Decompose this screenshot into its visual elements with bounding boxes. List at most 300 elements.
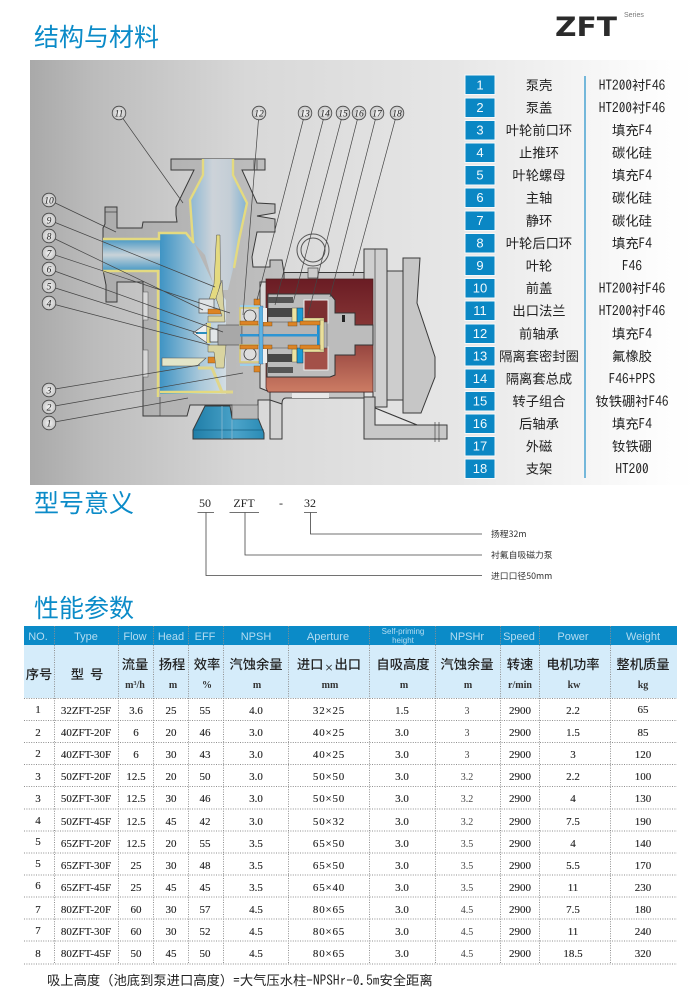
table header: m — [464, 680, 473, 691]
part callouts: 15 — [338, 110, 348, 120]
row 1: 32ZFT-25F — [61, 705, 111, 717]
row 10: 3.0 — [395, 904, 409, 916]
part numbers: 15 — [473, 394, 487, 408]
pump foot — [193, 405, 264, 439]
row 9: 3.5 — [461, 883, 473, 894]
part materials — [595, 75, 669, 476]
part names: 支架 — [526, 458, 552, 478]
table header: 自吸高度 — [376, 654, 430, 673]
part names: 泵盖 — [526, 98, 552, 116]
part names: 叶轮螺母 — [512, 165, 566, 184]
part names: 隔离套总成 — [506, 368, 572, 388]
row 8: 5 — [35, 858, 41, 870]
row 9 — [35, 880, 652, 894]
divider line — [584, 76, 586, 478]
row 9: 3.5 — [249, 882, 263, 894]
flange details — [105, 160, 257, 416]
row 11: 7 — [35, 925, 41, 937]
table header: Type — [74, 631, 98, 643]
row 4: 50×50 — [313, 771, 345, 783]
part numbers: 11 — [473, 303, 487, 318]
model code diagram — [198, 496, 553, 582]
row 5: 3.0 — [395, 793, 409, 805]
row 7: 65ZFT-20F — [61, 838, 111, 850]
row 11: 2900 — [509, 926, 532, 938]
row 1: 25 — [166, 705, 177, 717]
table header: Speed — [503, 631, 535, 643]
row 12: 45 — [166, 948, 177, 960]
table header: kw — [568, 680, 581, 691]
bearings — [240, 299, 267, 372]
row 7: 20 — [166, 838, 177, 850]
row 10: 80ZFT-20F — [61, 904, 111, 916]
row 1: 55 — [200, 705, 211, 717]
table header: mm — [322, 680, 339, 691]
series logo — [555, 12, 644, 43]
row 11: 52 — [200, 926, 210, 938]
row 7: 12.5 — [126, 838, 146, 850]
pump casing — [103, 159, 322, 419]
row 10: 4.5 — [249, 904, 263, 916]
part names: 叶轮前口环 — [506, 120, 572, 139]
table header: Head — [158, 631, 184, 643]
row 1: 32×25 — [313, 705, 345, 717]
part callouts: 16 — [354, 110, 364, 120]
row 7: 140 — [635, 838, 652, 850]
part numbers: 12 — [473, 326, 487, 341]
part numbers: 16 — [473, 416, 487, 431]
row 9: 25 — [130, 882, 142, 894]
row 5: 2900 — [509, 793, 532, 805]
table header: EFF — [195, 631, 216, 643]
table header: kg — [638, 680, 648, 691]
part callouts: 12 — [254, 110, 264, 120]
yellow liners — [103, 159, 247, 397]
part names — [499, 75, 579, 478]
housing top band — [284, 272, 364, 280]
row 2: 2900 — [509, 727, 532, 739]
rotor and magnets — [268, 297, 303, 373]
table header: NO. — [28, 631, 48, 643]
table header: r/min — [508, 680, 532, 691]
row 3: 40ZFT-30F — [61, 749, 111, 761]
row 3: 3 — [570, 749, 576, 761]
row 9: 65ZFT-45F — [61, 882, 111, 894]
row 7 — [35, 836, 652, 850]
row 12: 8 — [35, 948, 41, 960]
row 5: 3.2 — [461, 794, 473, 805]
part materials: 填充F4 — [612, 233, 652, 252]
row 8: 2900 — [509, 860, 532, 872]
inner rotor cavity — [304, 300, 345, 370]
row 2: 6 — [133, 727, 139, 739]
table header: m — [253, 680, 262, 691]
table header: Weight — [626, 631, 660, 643]
row 12: 3.0 — [395, 948, 409, 960]
row 4: 20 — [166, 771, 177, 783]
part numbers: 5 — [476, 168, 484, 182]
row 2: 85 — [638, 727, 649, 739]
row 12: 50 — [130, 948, 142, 960]
row 3: 2900 — [509, 749, 532, 761]
row 3 — [35, 748, 652, 761]
part numbers — [473, 78, 487, 476]
row 2: 40×25 — [313, 727, 345, 739]
part materials: HT200 — [615, 462, 649, 476]
row 5: 50ZFT-30F — [61, 793, 111, 805]
part materials: HT200衬F46 — [599, 75, 666, 94]
table header: 出口 — [335, 654, 361, 673]
part callouts: 14 — [320, 110, 330, 120]
part callouts: 1 — [47, 420, 51, 430]
row 7: 3.0 — [395, 838, 409, 850]
row 7: 3.5 — [249, 838, 263, 850]
title: structure and materials: 结构与材料 — [34, 18, 159, 54]
row 3: 43 — [200, 749, 211, 761]
row 5: 4 — [570, 793, 576, 805]
part numbers: 1 — [476, 78, 484, 92]
model code diagram: ZFT — [233, 496, 255, 510]
part numbers: 9 — [476, 258, 484, 273]
row 5: 46 — [200, 793, 211, 805]
part names: 叶轮 — [526, 256, 552, 274]
part numbers: 18 — [473, 461, 487, 476]
table header: m — [400, 680, 409, 691]
row 7: 65×50 — [313, 838, 345, 850]
table header: height — [392, 636, 415, 645]
row 5: 50×50 — [313, 793, 345, 805]
row 2: 40ZFT-20F — [61, 727, 111, 739]
row 6: 45 — [166, 816, 177, 828]
row 1: 3.6 — [129, 705, 143, 717]
row 12: 4.5 — [461, 949, 473, 960]
row 1: 1 — [35, 704, 41, 716]
row 9: 2900 — [509, 882, 532, 894]
row 10: 57 — [200, 904, 211, 916]
row 6: 3.0 — [395, 816, 409, 828]
part names: 后轴承 — [519, 414, 559, 432]
row 10: 180 — [635, 904, 652, 916]
row 6: 3.0 — [249, 816, 263, 828]
row 8: 25 — [130, 860, 142, 872]
row 1: 3 — [464, 706, 470, 717]
footnote: 吸上高度（池底到泵进口高度）=大气压水柱-NPSHr-0.5m安全距离 — [47, 970, 433, 989]
row 9: 3.0 — [395, 882, 409, 894]
row 6 — [35, 815, 652, 828]
table header: % — [202, 680, 212, 691]
table header: m — [125, 680, 134, 691]
part materials: HT200衬F46 — [599, 98, 666, 116]
part names: 止推环 — [519, 142, 559, 162]
row 11: 4.5 — [461, 927, 473, 938]
model code diagram: 50 — [199, 496, 211, 510]
row 1: 2.2 — [566, 705, 580, 717]
table header: 转速 — [507, 654, 533, 673]
row 4 — [35, 771, 652, 783]
part materials: F46 — [622, 258, 642, 272]
row 3: 6 — [133, 749, 139, 761]
row 5: 130 — [635, 793, 652, 805]
row 5 — [35, 793, 652, 805]
row 2: 46 — [200, 727, 211, 739]
row 1: 4.0 — [249, 705, 263, 717]
row 8 — [35, 858, 652, 872]
part names: 隔离套密封圈 — [499, 346, 579, 365]
row 12: 18.5 — [563, 948, 583, 960]
part numbers: 3 — [476, 122, 484, 138]
part callouts: 17 — [372, 110, 383, 120]
part numbers: 10 — [473, 280, 487, 296]
row 7: 4 — [570, 838, 576, 850]
isolation sleeve — [267, 294, 373, 377]
rear shaft — [240, 318, 327, 352]
blue pump chamber — [160, 233, 226, 394]
table header: Self-priming — [382, 627, 424, 636]
part numbers: 13 — [473, 348, 487, 364]
row 10: 30 — [166, 904, 177, 916]
series logo: ZFT — [555, 12, 618, 43]
table header: × — [324, 661, 334, 674]
part callouts: 2 — [47, 404, 52, 414]
part materials: HT200衬F46 — [599, 300, 666, 320]
row 2: 3 — [464, 728, 470, 739]
table header: 效率 — [194, 654, 220, 673]
part materials: 填充F4 — [612, 165, 652, 184]
part callouts: 10 — [44, 196, 54, 206]
table header: Power — [557, 631, 589, 643]
row 10: 7.5 — [566, 904, 580, 916]
heading: model meaning: 型号意义 — [34, 484, 134, 520]
row 8: 65×50 — [313, 860, 345, 872]
table header: 进口 — [297, 654, 323, 673]
heading: performance parameters: 性能参数 — [34, 589, 134, 625]
row 9: 6 — [35, 880, 41, 892]
row 8: 3.5 — [461, 861, 473, 872]
part numbers: 4 — [476, 145, 484, 160]
row 9: 45 — [200, 882, 211, 894]
panel: cutaway diagram — [30, 60, 464, 485]
part numbers: 8 — [476, 236, 484, 250]
part names: 转子组合 — [512, 391, 566, 410]
table header: 型 号 — [71, 664, 103, 683]
part names: 外磁 — [526, 436, 552, 455]
row 7: 5 — [35, 836, 41, 848]
row 6: 2900 — [509, 816, 532, 828]
performance table — [24, 626, 677, 964]
row 7: 3.5 — [461, 839, 473, 850]
table header: 扬程 — [159, 654, 185, 673]
row 1: 1.5 — [395, 705, 409, 717]
row 12: 320 — [635, 948, 652, 960]
table header: NPSH — [241, 631, 271, 643]
row 6: 7.5 — [566, 816, 580, 828]
row 10 — [35, 904, 652, 916]
table header: Aperture — [307, 631, 349, 643]
part materials: 氟橡胶 — [612, 346, 652, 365]
row 10: 4.5 — [461, 905, 473, 916]
table header: 汽蚀余量 — [229, 654, 283, 673]
part materials: 碳化硅 — [612, 142, 652, 162]
part numbers: 6 — [476, 190, 484, 205]
model code diagram: 32 — [304, 496, 316, 510]
row 4: 50 — [200, 771, 211, 783]
part callouts: 4 — [47, 300, 52, 310]
row 11: 80ZFT-30F — [61, 926, 111, 938]
row 10: 7 — [35, 904, 41, 916]
panel: parts and materials list — [464, 60, 696, 485]
row 2: 3.0 — [249, 727, 263, 739]
row 4: 50ZFT-20F — [61, 771, 111, 783]
row 8: 170 — [635, 860, 652, 872]
part materials: 碳化硅 — [612, 188, 652, 206]
part materials: HT200衬F46 — [599, 278, 666, 297]
row 4: 2.2 — [566, 771, 580, 783]
row 8: 3.5 — [249, 860, 263, 872]
model code diagram: 扬程32m — [491, 527, 527, 540]
row 9: 45 — [166, 882, 177, 894]
row 9: 65×40 — [313, 882, 345, 894]
row 10: 2900 — [509, 904, 532, 916]
row 8: 3.0 — [395, 860, 409, 872]
model code diagram: - — [279, 496, 283, 510]
table header: 整机质量 — [616, 654, 670, 673]
row 3: 3 — [464, 750, 470, 761]
row 3: 120 — [635, 749, 652, 761]
part callouts: 13 — [300, 110, 310, 120]
part numbers: 17 — [473, 438, 487, 454]
table header: 汽蚀余量 — [440, 654, 494, 673]
part callouts — [42, 106, 404, 430]
table header: 序号 — [26, 664, 52, 683]
row 12: 80ZFT-45F — [61, 948, 111, 960]
part materials: 填充F4 — [612, 324, 652, 342]
row 2: 20 — [166, 727, 177, 739]
row 11: 4.5 — [249, 926, 263, 938]
row 4: 3.0 — [395, 771, 409, 783]
row 3: 3.0 — [249, 749, 263, 761]
part names: 前盖 — [526, 278, 552, 297]
row 9: 230 — [635, 882, 652, 894]
row 11: 3.0 — [395, 926, 409, 938]
motor bracket and stand — [270, 249, 447, 442]
part names: 前轴承 — [519, 324, 559, 342]
impeller — [162, 235, 242, 392]
row 4: 3.2 — [461, 772, 473, 783]
table header: /h — [136, 680, 145, 691]
part names: 主轴 — [526, 188, 552, 206]
part callouts: 9 — [47, 216, 52, 226]
part materials: 填充F4 — [612, 120, 652, 139]
row 6: 50ZFT-45F — [61, 816, 111, 828]
row 5: 12.5 — [126, 793, 146, 805]
row 2: 1.5 — [566, 727, 580, 739]
row 9: 11 — [568, 882, 578, 894]
part names: 叶轮后口环 — [506, 233, 572, 252]
row 11: 30 — [166, 926, 177, 938]
outlet passage — [190, 159, 247, 290]
part materials: 填充F4 — [612, 414, 652, 432]
table header — [24, 626, 677, 698]
model code diagram: 衬氟自吸磁力泵 — [491, 548, 553, 561]
table header: 电机功率 — [546, 654, 600, 673]
red magnet housing — [266, 279, 373, 392]
row 12: 80×65 — [313, 948, 345, 960]
row 5: 3 — [35, 793, 41, 805]
row 12 — [35, 948, 652, 960]
row 3: 3.0 — [395, 749, 409, 761]
part materials: 碳化硅 — [612, 210, 652, 230]
row 6: 50×32 — [313, 816, 345, 828]
inlet passage — [103, 240, 160, 270]
part numbers: 2 — [476, 100, 484, 115]
eye bolt — [299, 236, 327, 278]
row 6: 3.2 — [461, 817, 473, 828]
row 10: 80×65 — [313, 904, 345, 916]
part number boxes — [465, 75, 495, 478]
part materials: 钕铁硼 — [612, 436, 652, 455]
row 12: 50 — [200, 948, 211, 960]
row 3: 30 — [166, 749, 177, 761]
part numbers: 14 — [473, 371, 487, 386]
part names: 静环 — [526, 210, 552, 230]
part callouts: 7 — [47, 250, 53, 260]
row 10: 60 — [130, 904, 142, 916]
part callouts: 3 — [46, 386, 52, 396]
row 7: 2900 — [509, 838, 532, 850]
row 1: 65 — [638, 704, 649, 716]
row 11: 80×65 — [313, 926, 345, 938]
row 2: 3.0 — [395, 727, 409, 739]
row 8: 65ZFT-30F — [61, 860, 111, 872]
row 3: 40×25 — [313, 749, 345, 761]
part names: 泵壳 — [526, 75, 552, 94]
part callouts: 8 — [47, 232, 52, 242]
part materials: F46+PPS — [609, 372, 656, 386]
row 8: 30 — [166, 860, 177, 872]
row 11: 240 — [635, 926, 652, 938]
row 6: 12.5 — [126, 816, 146, 828]
row 1: 2900 — [509, 705, 532, 717]
row 3: 2 — [35, 748, 41, 760]
part callouts: 6 — [47, 266, 52, 276]
row 8: 48 — [200, 860, 211, 872]
table header: m — [169, 680, 178, 691]
part callouts: 18 — [392, 110, 402, 120]
row 4: 3 — [35, 771, 41, 783]
part numbers: 7 — [476, 213, 484, 228]
row 11: 60 — [130, 926, 142, 938]
row 4: 100 — [635, 771, 652, 783]
row 12: 2900 — [509, 948, 532, 960]
row 5: 3.0 — [249, 793, 263, 805]
row 2 — [35, 727, 649, 739]
model code diagram: 进口口径50mm — [491, 569, 552, 582]
part names: 出口法兰 — [512, 300, 566, 320]
row 7: 55 — [200, 838, 211, 850]
table header: 流量 — [122, 654, 148, 673]
series logo: Series — [624, 12, 644, 19]
table header: Flow — [123, 631, 147, 643]
row 6: 190 — [635, 816, 652, 828]
table header: NPSHr — [450, 631, 484, 643]
row 5: 30 — [166, 793, 177, 805]
row 12: 4.5 — [249, 948, 263, 960]
row 2: 2 — [35, 727, 41, 739]
row 6: 4 — [35, 815, 41, 827]
row 4: 12.5 — [126, 771, 146, 783]
row 4: 3.0 — [249, 771, 263, 783]
row 11 — [35, 925, 652, 938]
